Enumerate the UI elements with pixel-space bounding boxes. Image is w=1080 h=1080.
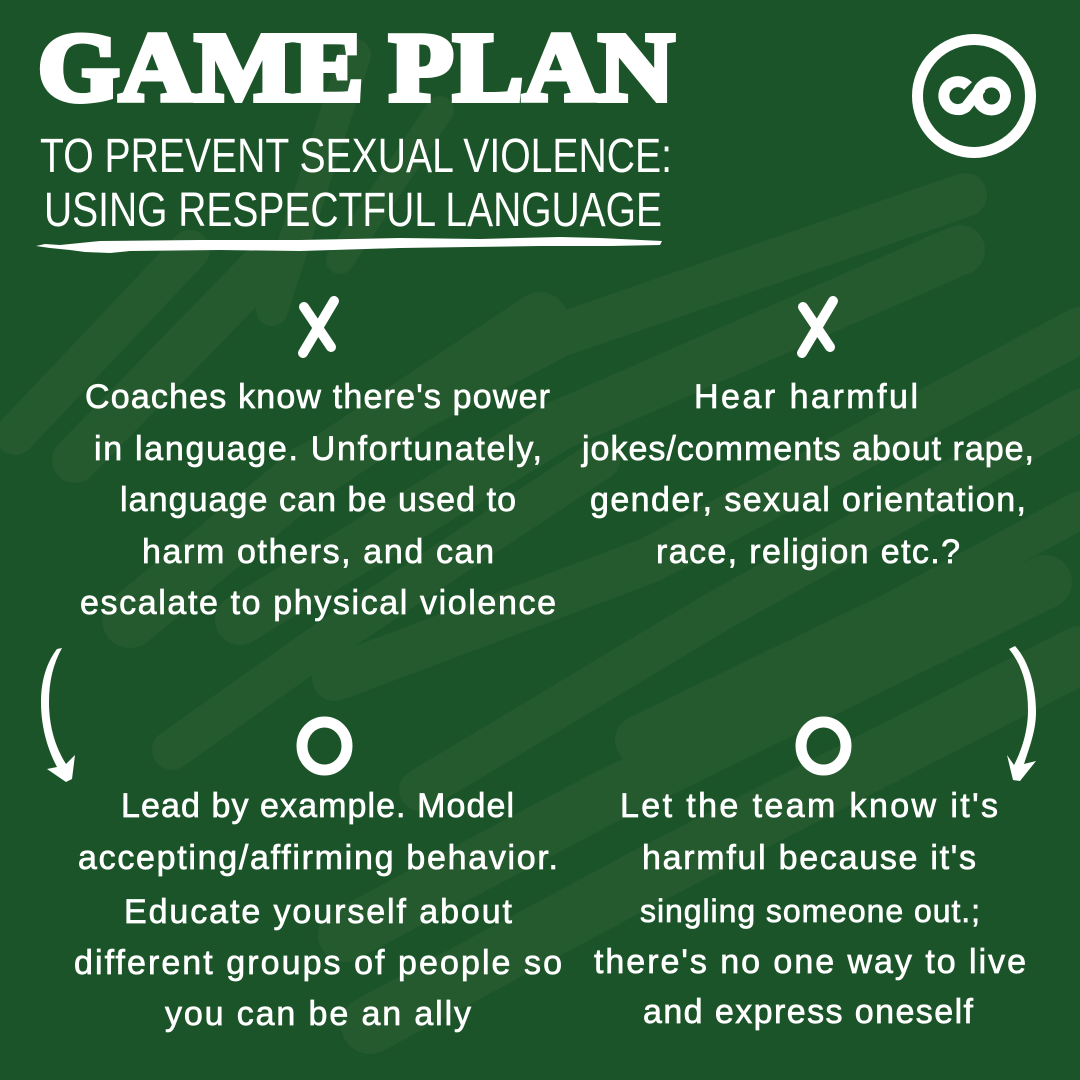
icon: X top left bbox=[303, 301, 334, 353]
panel: top right text: gender, sexual orientation, bbox=[590, 481, 1026, 519]
logo: infinity in circle bbox=[918, 40, 1030, 152]
panel: bottom left text: Lead by example. Model bbox=[121, 787, 514, 825]
panel: bottom right text: and express oneself bbox=[643, 993, 974, 1031]
panel: top right text: jokes/comments about rape, bbox=[581, 430, 1034, 468]
subtitle line 2: USING RESPECTFUL LANGUAGE bbox=[44, 184, 662, 237]
panel: top right text: Hear harmful bbox=[694, 378, 918, 416]
title: GAME PLAN bbox=[38, 14, 674, 121]
panel: bottom left text: accepting/affirming behavior. bbox=[78, 839, 558, 877]
panel: bottom right text: there's no one way to live bbox=[594, 943, 1026, 981]
arrow: right bbox=[1007, 646, 1036, 781]
icon: O bottom right bbox=[801, 722, 846, 770]
subtitle line 1: TO PREVENT SEXUAL VIOLENCE: bbox=[40, 130, 672, 183]
panel: bottom left text: you can be an ally bbox=[165, 995, 471, 1033]
panel: bottom right text: singling someone out.; bbox=[640, 893, 980, 929]
panel: bottom left text: different groups of people so bbox=[74, 944, 562, 982]
panel: top left text bbox=[80, 378, 556, 622]
panel: top left text: language can be used to bbox=[120, 481, 516, 519]
arrow: left bbox=[41, 648, 75, 782]
panel: top left text: Coaches know there's power bbox=[85, 378, 550, 416]
panel: bottom left text bbox=[74, 787, 562, 1033]
panel: bottom right text bbox=[594, 787, 1026, 1031]
panel: bottom right text: Let the team know it's bbox=[620, 787, 998, 825]
panel: bottom right text: harmful because it's bbox=[642, 839, 976, 877]
icon: O bottom left bbox=[302, 722, 347, 770]
panel: bottom left text: Educate yourself about bbox=[124, 893, 513, 931]
brush underline bbox=[36, 237, 662, 253]
panel: top right text: race, religion etc.? bbox=[656, 533, 960, 571]
icon: X top right bbox=[802, 301, 833, 353]
panel: top left text: escalate to physical violence bbox=[80, 584, 556, 622]
panel: top right text bbox=[581, 378, 1034, 571]
panel: top left text: harm others, and can bbox=[142, 533, 494, 571]
panel: top left text: in language. Unfortunately, bbox=[94, 430, 542, 468]
